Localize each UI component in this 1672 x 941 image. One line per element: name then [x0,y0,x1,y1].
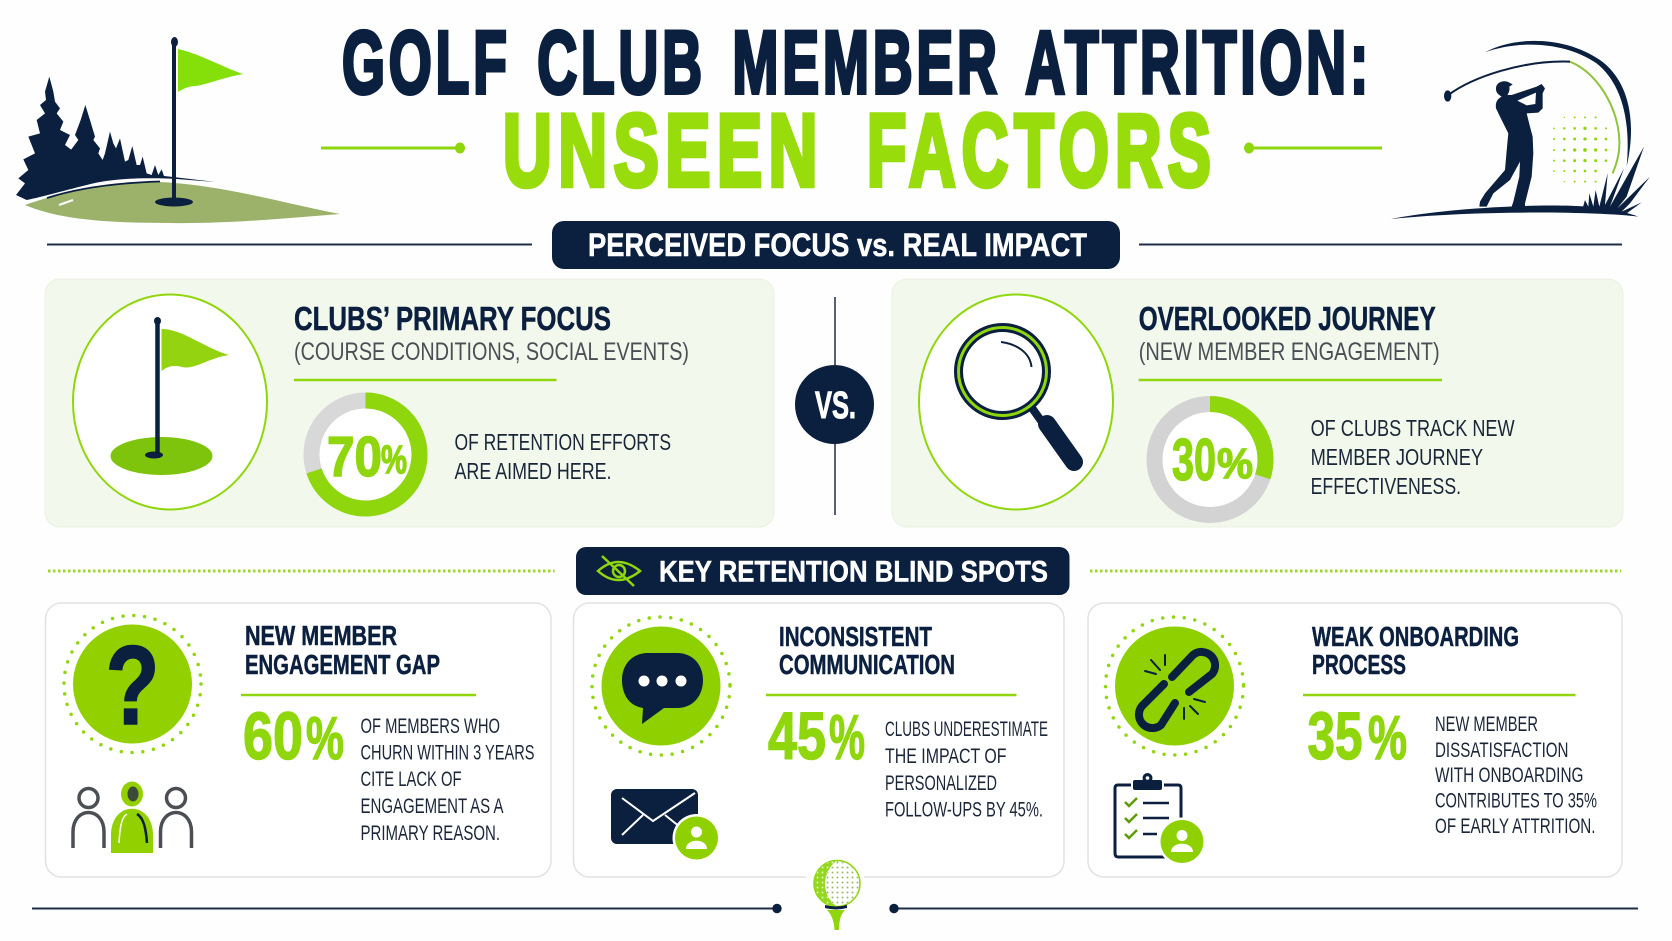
panel: overlooked journey [892,279,1623,527]
divider right [1139,244,1622,246]
dotted divider right [1090,570,1621,572]
section heading: perceived focus vs real impact: PERCEIVED FOCUS vs. REAL IMPACT [588,227,1087,263]
footer rule right [889,904,1638,913]
flag pennant [178,49,243,92]
panel: weak onboarding process [1088,603,1622,877]
stat description: CHURN WITHIN 3 YEARS [360,742,534,764]
club [1448,62,1570,95]
ridge line [47,182,160,198]
icon: people group [73,782,192,853]
stat 60%: % [306,705,344,772]
donut chart 70%: % [381,438,407,482]
icon: clipboard checklist with person badge [1115,773,1206,866]
panel: inconsistent communication [574,603,1064,877]
stat description: OF MEMBERS WHO [360,715,500,738]
swing arc [1485,41,1631,167]
icon: envelope with person badge [611,789,720,862]
panel heading: OVERLOOKED JOURNEY [1139,300,1436,337]
stat description: OF RETENTION EFFORTS [454,429,671,455]
stat description [1435,713,1597,838]
stat description: ARE AIMED HERE. [454,458,612,484]
green fairway mound [25,182,340,223]
flag pole [172,40,176,202]
card heading [1312,621,1519,680]
panel heading: CLUBS’ PRIMARY FOCUS [294,300,611,337]
right title accent [1244,142,1382,154]
left title accent [321,142,465,154]
pole tip [171,37,178,47]
illustration: golf green with flag and pine trees [16,37,340,223]
donut chart 30%: 30 [1172,427,1216,493]
stat 60%: 60 [243,699,303,774]
icon: broken chain link [1106,617,1244,755]
highlight on mound [59,200,73,205]
grass [1583,147,1650,213]
stat description: OF EARLY ATTRITION. [1435,815,1596,838]
footer rule left [32,904,782,913]
icon: magnifying glass in oval [919,294,1113,510]
stat 35%: 35 [1308,699,1362,774]
card heading: PROCESS [1312,649,1406,680]
panel subheading: (COURSE CONDITIONS, SOCIAL EVENTS) [294,338,689,366]
accent rule [241,694,476,696]
pine trees [16,77,216,200]
donut chart 30% [1154,404,1266,515]
stat description: MEMBER JOURNEY [1311,444,1483,470]
stat description [885,718,1048,822]
stat description [360,715,534,845]
accent rule [1303,694,1576,696]
donut chart 70%: 70 [327,425,382,489]
stat description [1311,415,1515,499]
golfer body [1479,81,1545,207]
panel: clubs' primary focus [45,279,774,527]
card heading: NEW MEMBER [245,620,397,651]
panel: new member engagement gap [46,603,551,877]
stat description [454,429,671,484]
card heading: INCONSISTENT [779,621,932,652]
accent rule [1139,379,1442,381]
donut chart 30%: % [1217,440,1253,488]
stat description: NEW MEMBER [1435,713,1538,736]
section heading: key retention blind spots: KEY RETENTION BLIND SPOTS [659,556,1048,588]
card heading: COMMUNICATION [779,649,955,680]
icon: question mark [64,616,201,752]
vs divider [795,297,874,515]
stat description: THE IMPACT OF [885,745,1006,768]
accent rule [294,379,556,381]
divider left [47,244,532,246]
donut chart 70% [312,400,420,508]
stat description: EFFECTIVENESS. [1311,473,1461,499]
stat description: CLUBS UNDERESTIMATE [885,718,1048,741]
stat 45%: % [829,703,865,773]
stat description: WITH ONBOARDING [1435,764,1584,787]
card heading [245,620,440,680]
stat 35%: % [1368,704,1407,773]
icon: flag in oval [73,294,267,510]
stat description: ENGAGEMENT AS A [360,795,504,818]
stat description: PERSONALIZED [885,772,997,795]
title line 2: FACTORS [867,94,1217,208]
section heading: perceived focus vs real impact [552,221,1120,269]
stat description: OF CLUBS TRACK NEW [1311,415,1515,441]
green swing trail [1570,62,1619,173]
title line 2: UNSEEN [503,94,824,208]
stat description: FOLLOW-UPS BY 45%. [885,798,1043,822]
stat description: CITE LACK OF [360,768,462,791]
gap between arms [1517,93,1536,105]
accent rule [766,694,1016,696]
icon: question mark: ? [106,623,160,748]
illustration: golfer silhouette [1391,41,1650,219]
icon: crossed-out eye [598,556,640,586]
dotted divider left [48,570,554,572]
stat description: DISSATISFACTION [1435,739,1568,762]
vs divider: VS. [815,385,856,427]
card heading: ENGAGEMENT GAP [245,649,440,680]
card heading: WEAK ONBOARDING [1312,621,1519,652]
icon: golf ball on tee [806,860,864,930]
stat 45%: 45 [768,699,826,774]
icon: speech bubble [592,617,730,755]
card heading [779,621,955,680]
ground [1391,206,1638,219]
stat description: PRIMARY REASON. [360,822,500,845]
section heading: key retention blind spots [576,547,1070,595]
panel subheading: (NEW MEMBER ENGAGEMENT) [1139,338,1440,366]
flag hole [155,198,193,206]
title line 2 [503,94,1217,208]
stat description: CONTRIBUTES TO 35% [1435,790,1597,812]
halftone dots [1553,116,1607,183]
club head [1444,90,1451,102]
